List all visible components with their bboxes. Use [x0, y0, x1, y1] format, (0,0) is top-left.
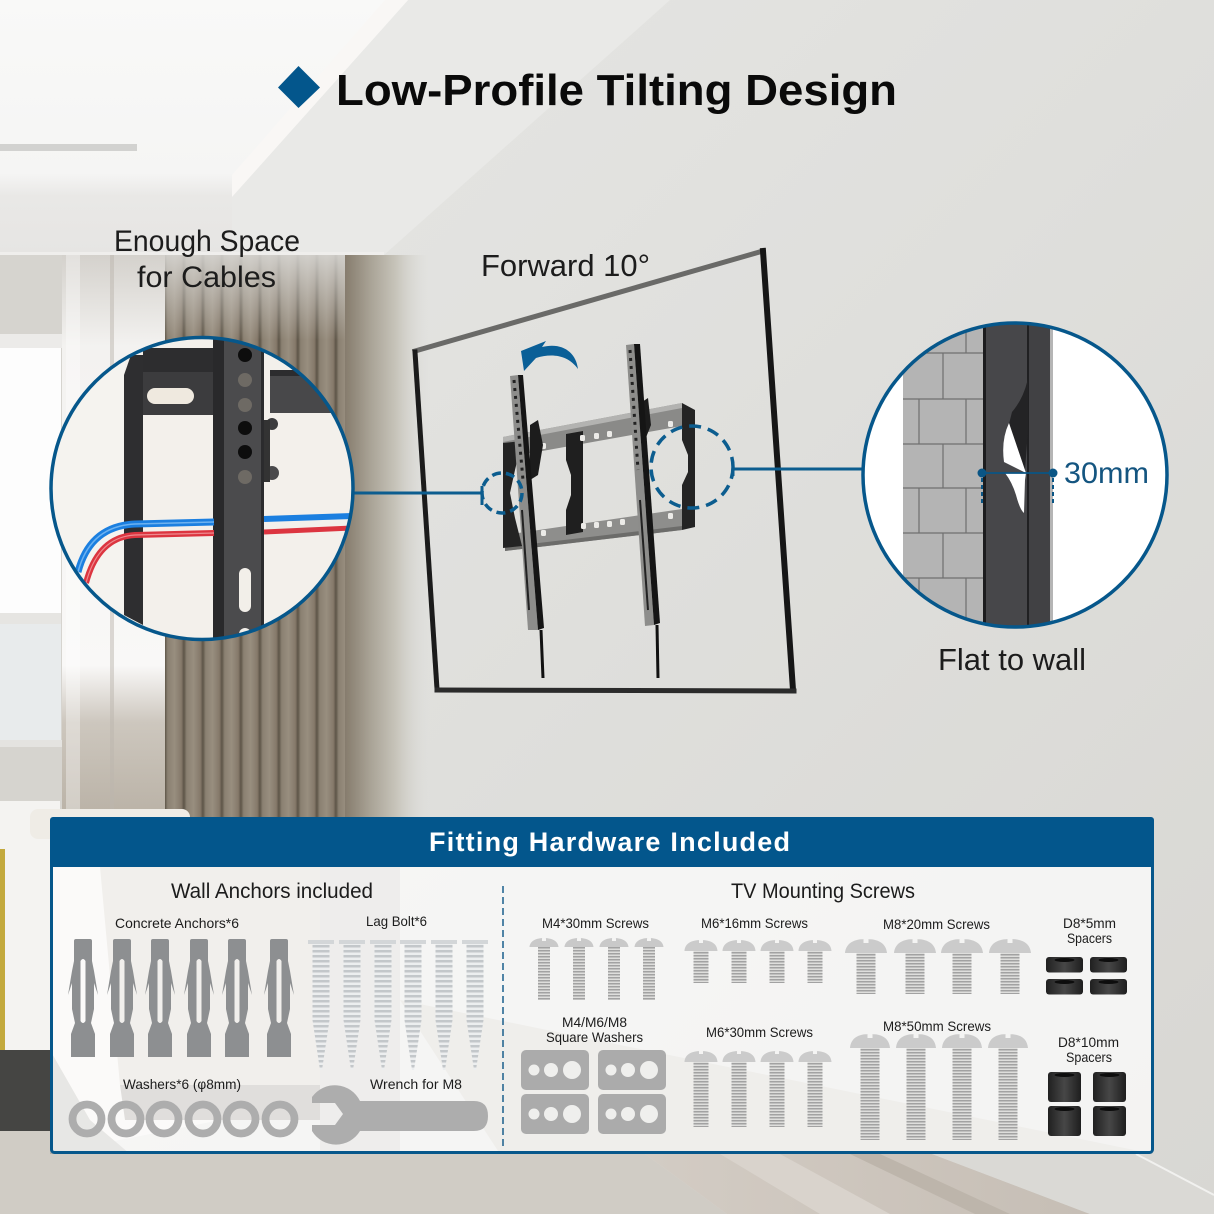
- floor: carpet and wood: [0, 1131, 1214, 1214]
- group: D8x10 spacers: [1048, 1034, 1126, 1136]
- TV outline frame: [415, 251, 794, 691]
- callout marker: left dashed circle: [353, 473, 522, 513]
- objects seen through panel: [50, 867, 1154, 1154]
- group: washers: [72, 1076, 294, 1134]
- group: M8x50 screws: [850, 1018, 1028, 1140]
- group: concrete anchors: [68, 915, 294, 1057]
- group: M4x30 screws: [530, 915, 664, 1000]
- panel: flat to wall detail circle: [863, 320, 1167, 630]
- tilting wall mount: [503, 344, 695, 678]
- callout marker: right dashed circle: [651, 426, 863, 508]
- group: D8x5 spacers: [1046, 915, 1127, 994]
- group: D8x10 spacers: D8*10mm: [1058, 1034, 1119, 1050]
- icon: title diamond: [278, 66, 320, 108]
- heading: TV mounting screws: TV Mounting Screws: [731, 880, 915, 903]
- group: wrench: [312, 1076, 488, 1145]
- group: square washers: M4/M6/M8: [562, 1014, 627, 1030]
- group: D8x5 spacers: D8*5mm: [1063, 915, 1116, 931]
- bracket pivots: [530, 398, 651, 480]
- group: M8x20 screws: M8*20mm Screws: [883, 916, 990, 932]
- icon: tilt arrow: [521, 341, 578, 371]
- heading: flat to wall: Flat to wall: [938, 642, 1086, 677]
- panel header bar: [50, 817, 1154, 867]
- group: lag bolts: Lag Bolt*6: [366, 913, 427, 929]
- bed: [0, 801, 190, 1131]
- heading: forward 10 degrees: Forward 10°: [481, 248, 650, 283]
- group: D8x10 spacers: Spacers: [1066, 1049, 1112, 1065]
- panel: cable detail circle: [50, 337, 355, 641]
- drape curtain: [165, 255, 430, 820]
- left arm: [510, 375, 544, 678]
- group: M6x30 screws: M6*30mm Screws: [706, 1024, 813, 1040]
- window and wall at left: [0, 255, 66, 815]
- heading: wall anchors: Wall Anchors included: [171, 880, 373, 903]
- group: D8x5 spacers: Spacers: [1067, 930, 1112, 946]
- group: washers: Washers*6 (φ8mm): [123, 1076, 241, 1092]
- heading: enough space for cables: [114, 225, 300, 294]
- label: 30mm: 30mm: [1064, 457, 1149, 490]
- group: M4x30 screws: M4*30mm Screws: [542, 915, 649, 931]
- group: M8x50 screws: M8*50mm Screws: [883, 1018, 991, 1034]
- group: M6x16 screws: [684, 915, 832, 983]
- group: concrete anchors: Concrete Anchors*6: [115, 915, 239, 931]
- group: M6x16 screws: M6*16mm Screws: [701, 915, 808, 931]
- group: lag bolts: [308, 913, 488, 1070]
- right arm: [626, 344, 660, 678]
- group: wrench: Wrench for M8: [370, 1076, 462, 1092]
- group: M8x20 screws: [845, 916, 1031, 994]
- divider: [502, 886, 504, 1146]
- rail holes: [541, 421, 673, 536]
- group: square washers: [521, 1014, 666, 1134]
- panel header bar: Fitting Hardware Included: [429, 827, 790, 857]
- cables: [78, 516, 352, 583]
- heading: enough space for cables: for Cables: [137, 261, 276, 294]
- brick wall: [903, 320, 983, 630]
- 30mm dimension marker: [978, 468, 1058, 506]
- wall plate rails: [503, 403, 695, 551]
- sheer curtains: [62, 255, 166, 825]
- title: Low-Profile Tilting Design: [336, 66, 897, 115]
- panel: fitting hardware included: [50, 817, 1154, 1152]
- panel body: [52, 818, 1152, 1152]
- group: M6x30 screws: [684, 1024, 832, 1127]
- group: square washers: Square Washers: [546, 1029, 643, 1045]
- heading: enough space for cables: Enough Space: [114, 225, 300, 258]
